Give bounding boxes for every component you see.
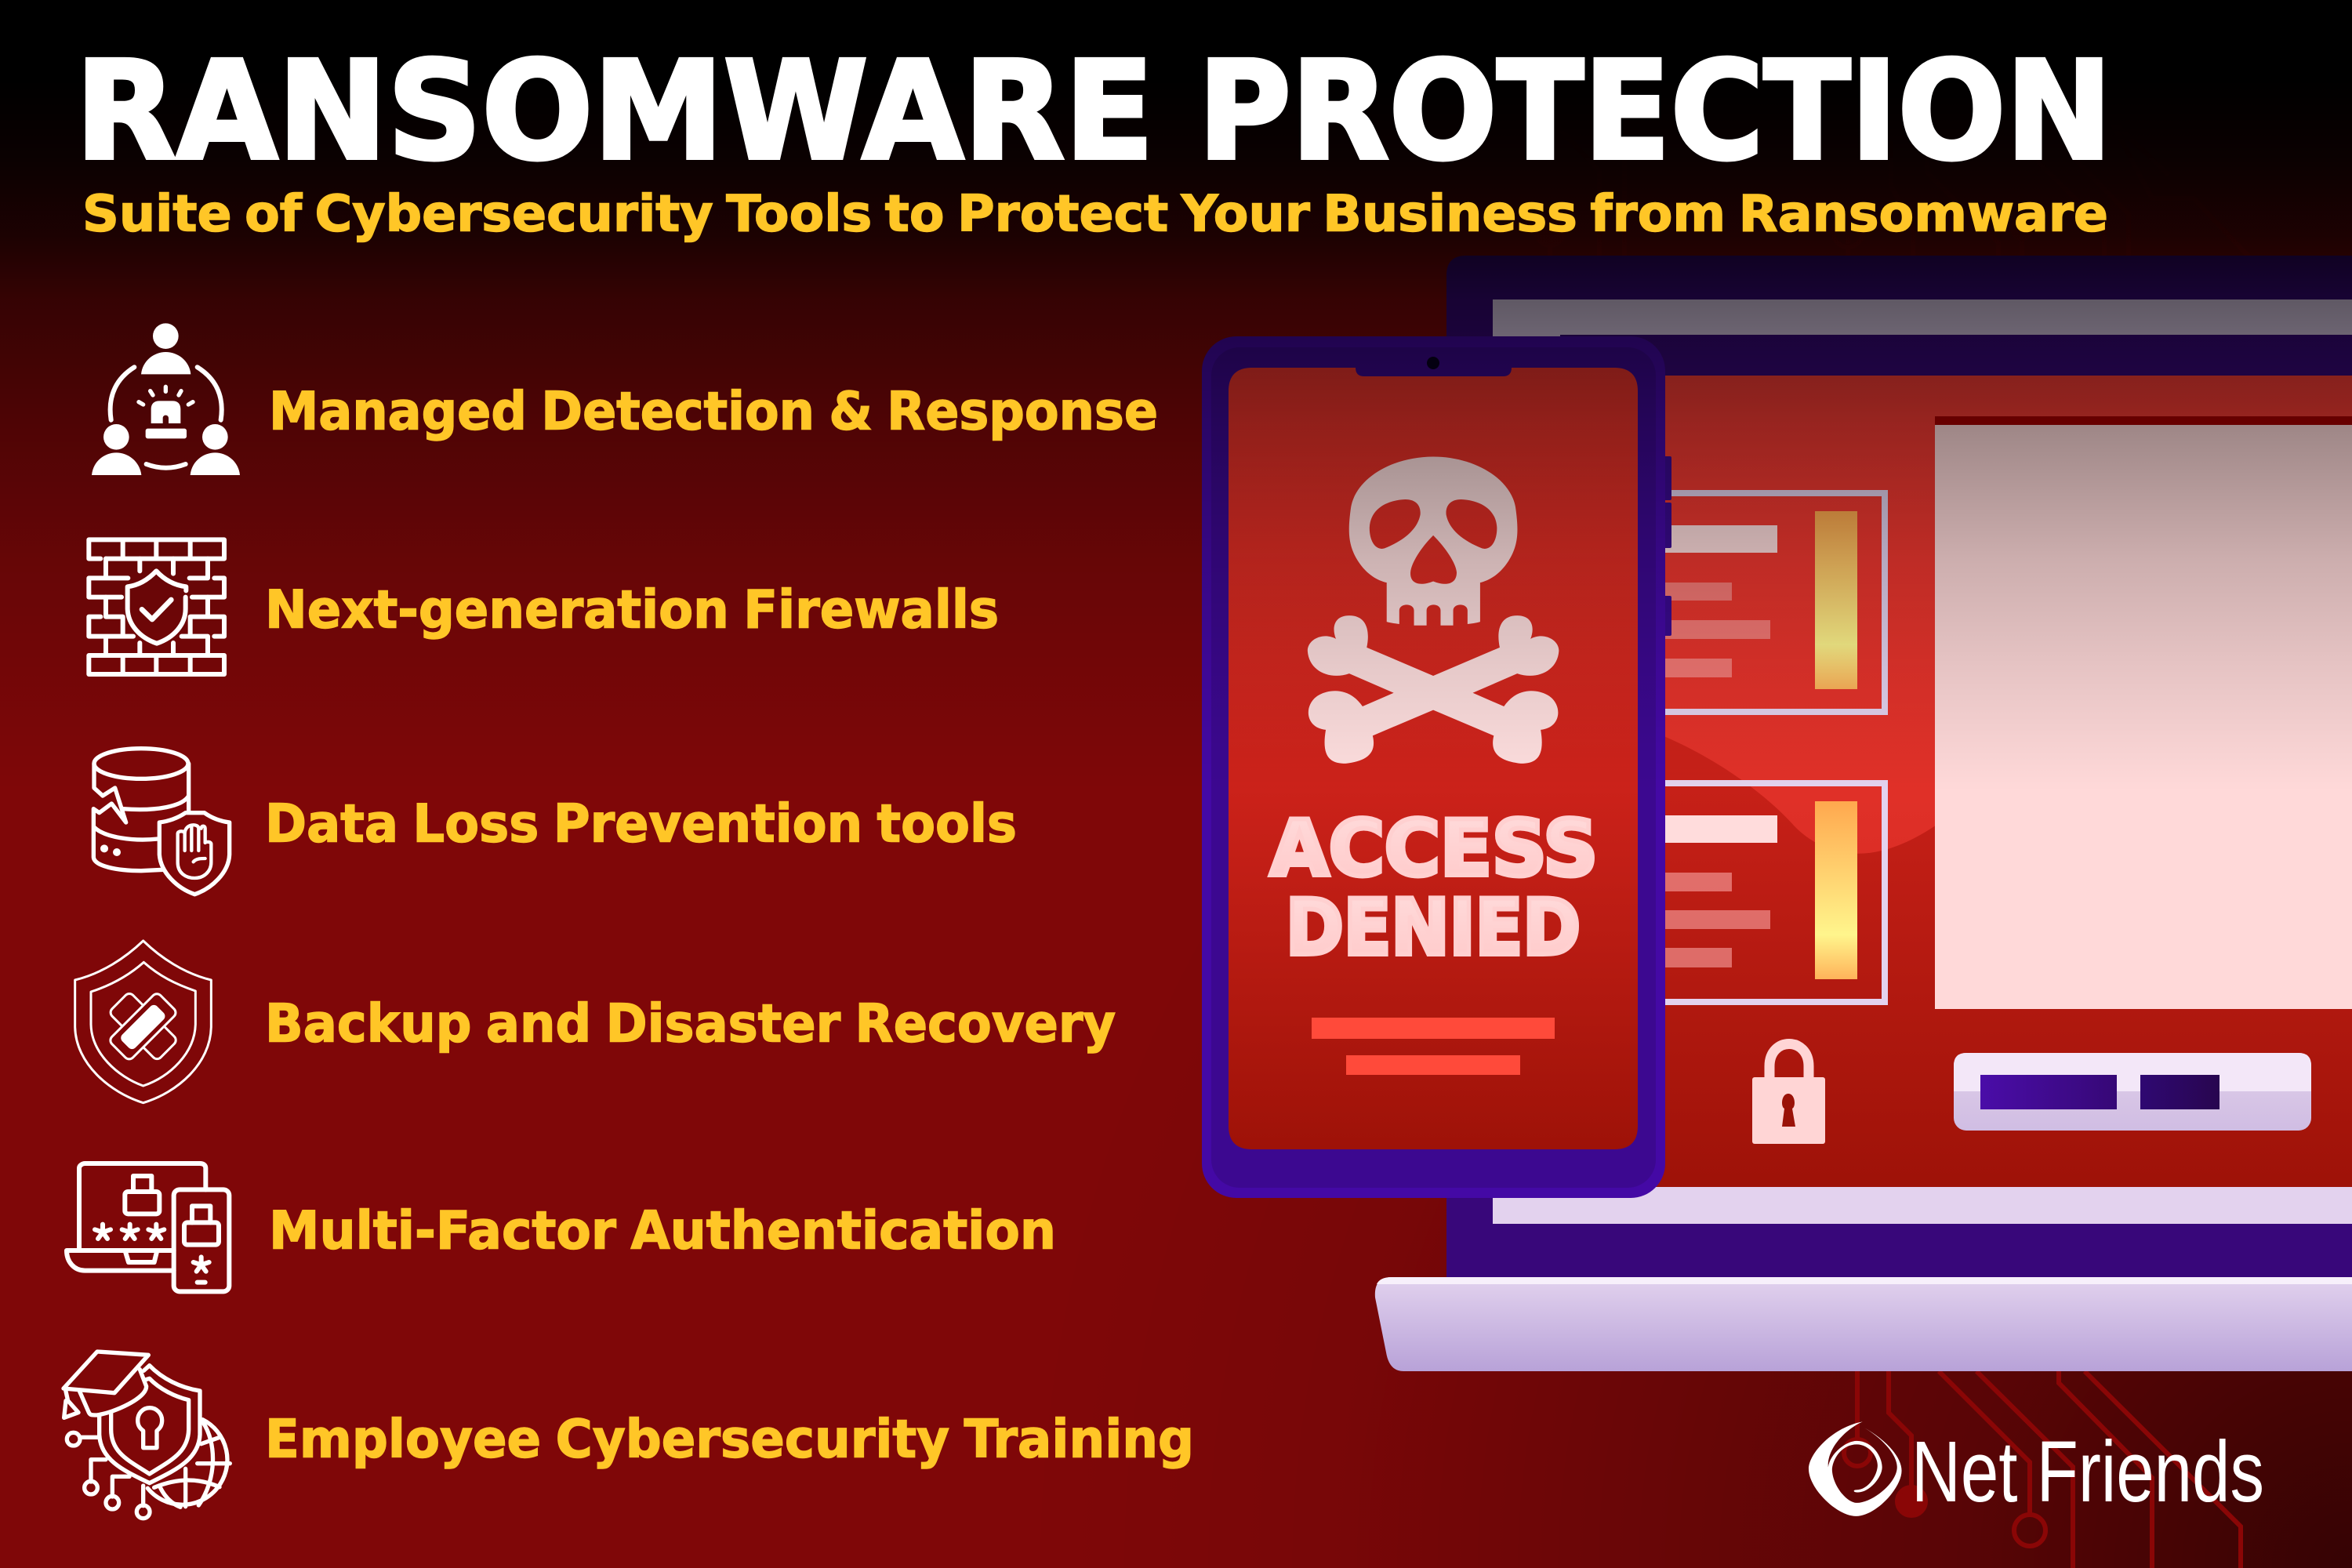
icon: skull and crossbones (1308, 456, 1559, 764)
phone red bars (1312, 1018, 1555, 1075)
button (1954, 1053, 2311, 1131)
dark top shading overlay (0, 0, 2352, 792)
logo mark (1809, 1421, 1902, 1516)
phone camera (1427, 357, 1439, 369)
item: data loss prevention (93, 749, 1017, 895)
laptop screen dark wave (1646, 729, 2352, 1187)
access denied message: ACCESS (1270, 804, 1598, 894)
label: Employee Cybersecurity Training (265, 1408, 1194, 1469)
laptop base (1375, 1277, 2352, 1371)
data card 2 (1568, 783, 1885, 1002)
laptop screen red area (1639, 376, 2352, 1187)
laptop bezel (1446, 256, 2352, 1286)
label: Managed Detection & Response (269, 381, 1158, 442)
laptop bottom strip (1493, 1187, 2352, 1224)
phone side buttons (1662, 456, 1671, 636)
label: Next-generation Firewalls (265, 579, 999, 640)
icon: padlock (1752, 1044, 1825, 1144)
access denied message (1270, 804, 1598, 973)
laptop (1375, 256, 2352, 1371)
laptop top bar (1493, 299, 2352, 336)
subtitle: Suite of Cybersecurity Tools to Protect Your Business from Ransomware (82, 185, 2108, 243)
icon: team around siren (92, 323, 240, 475)
item: employee cybersecurity training (64, 1352, 1194, 1519)
data card 1 (1568, 493, 1885, 712)
title: PROTECTION (1198, 31, 2112, 190)
icon: graduation cap, shield and globe (64, 1352, 230, 1519)
circuit traces bottom (1844, 1371, 2241, 1568)
icon: laptop and phone with locks (67, 1163, 229, 1291)
access denied message: DENIED (1286, 884, 1581, 973)
item: backup and disaster recovery (75, 941, 1116, 1103)
white panel (1935, 416, 2352, 1009)
phone (1202, 336, 1671, 1198)
title (75, 31, 2112, 190)
item: multi-factor authentication (67, 1163, 1056, 1291)
title: RANSOMWARE (75, 31, 1154, 190)
label: Backup and Disaster Recovery (265, 993, 1116, 1054)
item: next-generation firewalls (89, 539, 999, 674)
circuit traces top (1537, 122, 2251, 259)
icon: shield with bandage (75, 941, 211, 1103)
phone screen (1229, 368, 1638, 1149)
icon: brick wall with shield (89, 539, 224, 674)
label: Multi-Factor Authentication (269, 1200, 1056, 1261)
icon: database with shield and hand (93, 749, 230, 895)
label: Data Loss Prevention tools (265, 793, 1017, 855)
phone body (1202, 336, 1665, 1198)
item: managed detection and response (92, 323, 1158, 475)
logo: Net Friends (1809, 1421, 2264, 1520)
logo wordmark: Net Friends (1911, 1424, 2264, 1520)
